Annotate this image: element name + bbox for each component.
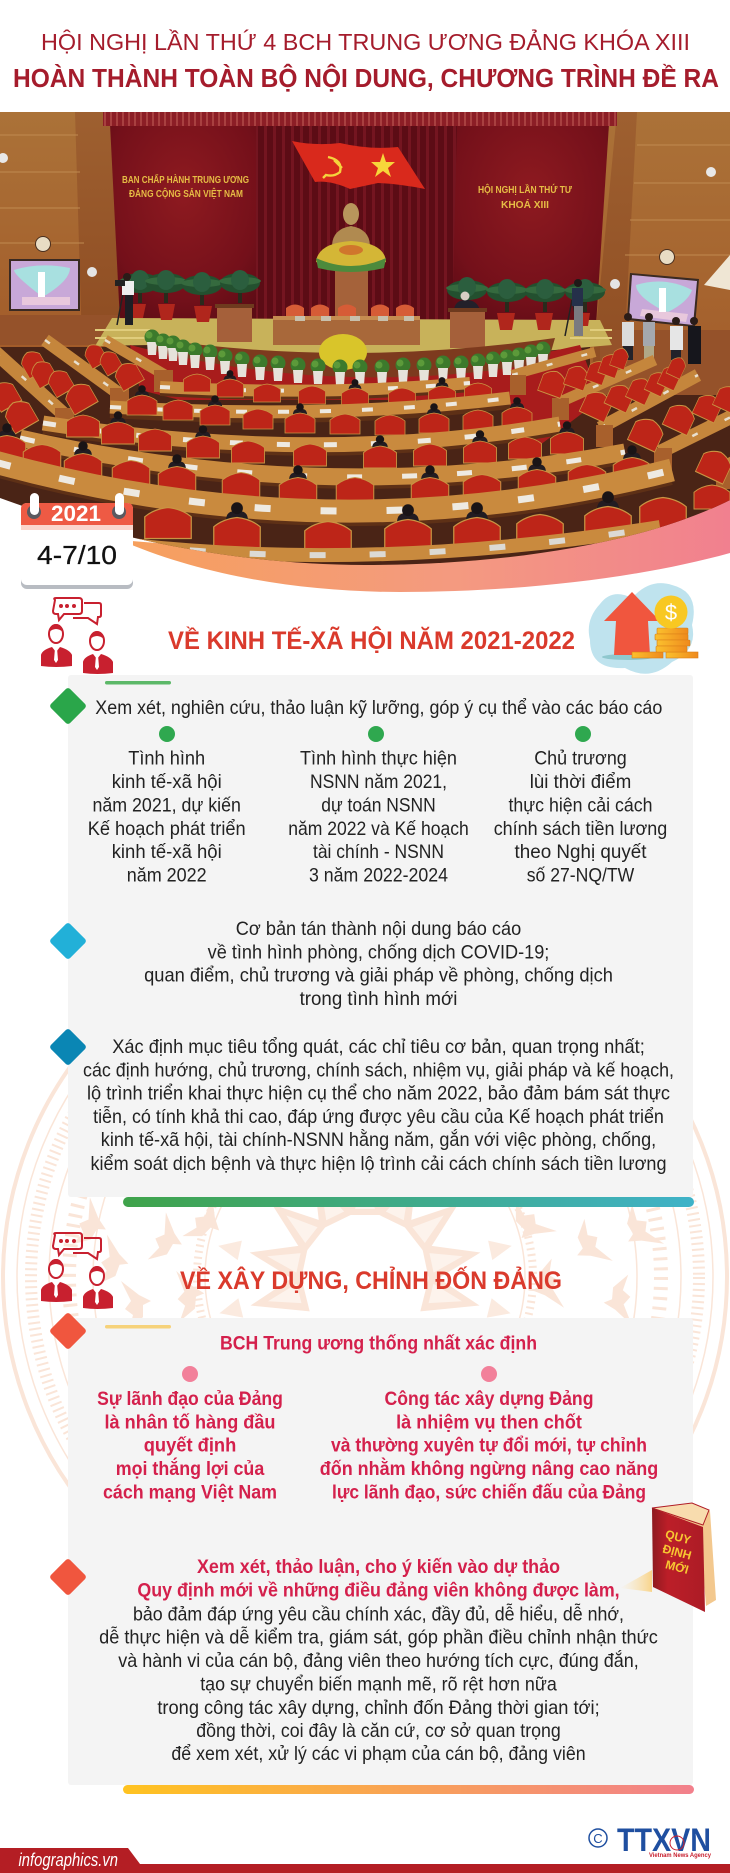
left column text [97,1388,283,1503]
icon: blue diamond [49,922,87,960]
footer red band [0,1848,730,1873]
seating row C [43,411,584,468]
left column text: là nhân tố hàng đầu [104,1412,276,1434]
objectives text: kinh tế-xã hội, tài chính-NSNN hằng năm, gắn với việc phòng, chống, [101,1128,656,1151]
right column text: Công tác xây dựng Đảng [384,1388,594,1410]
red curtains [103,112,617,325]
covid text: về tình hình phòng, chống dịch COVID-19; [208,942,549,964]
icon: rule book [620,1503,716,1612]
left column text: cách mạng Việt Nam [103,1481,277,1503]
wall lettering: KHOÁ XIII [501,198,549,211]
column 1 text [88,748,246,886]
icon: red diamond 2 [49,1558,87,1596]
objectives text: tiễn, có tính khả thi cao, đáp ứng được yêu cầu của Kế hoạch phát triển [93,1105,664,1128]
calendar date: 4-7/10 [37,540,117,570]
regulation text [99,1556,658,1765]
green bottom bar [123,1197,694,1207]
column 1 text: kinh tế-xã hội [112,771,222,793]
title [13,27,719,93]
right column text: là nhiệm vụ then chốt [396,1412,582,1434]
column 2 text [288,748,469,886]
screens and clocks [0,153,730,327]
wood base of plant row [150,338,555,377]
wall lettering: ĐẢNG CỘNG SẢN VIỆT NAM [129,187,243,200]
right column text: đốn nhằm không ngừng nâng cao năng [320,1456,658,1480]
cameramen and press [115,273,701,364]
column 1 text: Tình hình [128,748,205,770]
side wing desks [0,340,730,489]
icon: people discussing (section 1) [41,598,113,674]
objectives text: các định hướng, chủ trương, chính sách, nhiệm vụ, giải pháp và kế hoạch, [83,1059,674,1081]
panel: party building [49,1312,694,1794]
column 1 text: Kế hoạch phát triển [88,818,246,840]
wall lettering: BAN CHẤP HÀNH TRUNG ƯƠNG [122,173,249,186]
icon: people discussing (section 2) [41,1233,113,1309]
orange pink curved band [120,495,730,592]
yellow flower mound [319,334,367,370]
seating row A [160,370,492,406]
icon: rule book: QUY [664,1527,692,1547]
website label: infographics.vn [18,1850,118,1870]
heading: socio-economic: VỀ KINH TẾ-XÃ HỘI NĂM 2021-2022 [168,625,575,655]
bullet dots [159,726,591,742]
right column text: lực lãnh đạo, sức chiến đấu của Đảng [332,1481,646,1503]
wall lettering [122,174,572,208]
left column text: mọi thắng lợi của [116,1456,264,1480]
icon: rule book: MỚI [664,1556,690,1577]
left column text: Sự lãnh đạo của Đảng [97,1388,283,1410]
seating row F [130,527,660,555]
bust and flowers [316,203,386,322]
left column text: quyết định [144,1435,236,1457]
covid text: trong tình hình mới [300,988,457,1010]
icon: dark blue diamond [49,1028,87,1066]
seating row B [110,385,532,435]
cycad plants [119,270,606,330]
icon: rising arrow and coins [589,583,698,674]
TTXVN logo: Vietnam News Agency [649,1853,712,1859]
regulation text: và hành vi của cán bộ, đảng viên theo hướng tích cực, đúng đắn, [118,1649,639,1672]
objectives text: Xác định mục tiêu tổng quát, các chỉ tiêu cơ bản, quan trọng nhất; [112,1036,645,1058]
objectives text: kiểm soát dịch bệnh và thực hiện lộ trình cải cách chính sách tiền lương [90,1153,666,1175]
date calendar [21,493,133,589]
regulation text: dễ thực hiện và dễ kiểm tra, giám sát, góp phần điều chỉnh nhận thức [99,1626,658,1648]
title line 1: HỘI NGHỊ LẦN THỨ 4 BCH TRUNG ƯƠNG ĐẢNG KHÓA XIII [41,27,690,55]
panel: socio-economic [49,675,694,1207]
chairs and table on stage [215,292,487,348]
regulation text: đồng thời, coi đây là căn cứ, cơ sở quan trọng [196,1720,561,1742]
objectives text: lộ trình triển khai thực hiện cụ thể cho năm 2022, bảo đảm bám sát thực [87,1083,670,1105]
objectives text [83,1036,674,1175]
regulation text: để xem xét, xử lý các vi phạm của cán bộ, đảng viên [171,1743,586,1765]
column 1 text: năm 2021, dự kiến [92,794,241,816]
side wing chairs [0,341,730,484]
regulation text: bảo đảm đáp ứng yêu cầu chính xác, đầy đủ, dễ hiểu, dễ nhớ, [133,1602,624,1625]
column 2 text: dự toán NSNN [321,794,436,816]
seating row D [0,423,651,502]
covid text: Cơ bản tán thành nội dung báo cáo [236,918,521,940]
column 1 text: năm 2022 [127,864,207,886]
regulation text: tạo sự chuyển biến mạnh mẽ, rõ rệt hơn nữa [200,1673,557,1695]
potted plants row [144,330,550,385]
yellow accent bar [105,1325,171,1328]
icon: green diamond [49,687,87,725]
title line 2: HOÀN THÀNH TOÀN BỘ NỘI DUNG, CHƯƠNG TRÌNH ĐỀ RA [13,63,719,93]
seating row E [0,462,730,552]
pink bullets [182,1366,497,1382]
right column text [320,1388,658,1503]
column 2 text: tài chính - NSNN [313,841,444,863]
column 3 text: số 27-NQ/TW [527,864,635,886]
covid text: quan điểm, chủ trương và giải pháp về phòng, chống dịch [144,964,613,986]
heading: party building: VỀ XÂY DỰNG, CHỈNH ĐỐN ĐẢNG [180,1265,562,1295]
TTXVN logo: C [593,1831,603,1846]
column 2 text: NSNN năm 2021, [310,771,447,793]
regulation text: trong công tác xây dựng, chỉnh đốn Đảng thời gian tới; [157,1697,600,1719]
regulation text: Quy định mới về những điều đảng viên không được làm, [137,1580,620,1602]
party flag and national flag [292,141,425,189]
icon: rising arrow and coins: $ [665,600,677,625]
column 3 text: chính sách tiền lương [494,818,667,840]
icon: red diamond [49,1312,87,1350]
conference hall photo [0,112,730,572]
column 3 text: Chủ trương [534,748,627,770]
TTXVN logo: TTXVN [617,1822,711,1858]
green accent bar [105,681,171,684]
covid text [144,918,613,1010]
wood walls [0,112,730,395]
carpet [130,345,600,445]
column 2 text: năm 2022 và Kế hoạch [288,818,469,840]
icon: rule book: ĐỊNH [661,1542,693,1563]
yellow pink bottom bar [123,1785,694,1794]
column 1 text: kinh tế-xã hội [112,841,222,863]
column 2 text: 3 năm 2022-2024 [309,864,448,886]
TTXVN logo [589,1822,712,1859]
stage floor [96,318,612,353]
review intro text: Xem xét, nghiên cứu, thảo luận kỹ lưỡng, góp ý cụ thể vào các báo cáo [95,697,662,719]
regulation text: Xem xét, thảo luận, cho ý kiến vào dự thảo [197,1556,560,1578]
wall lettering: HỘI NGHỊ LẦN THỨ TƯ [478,183,573,196]
right column text: và thường xuyên tự đổi mới, tự chỉnh [331,1435,647,1457]
column 3 text: theo Nghị quyết [514,841,647,863]
subheading: BCH Trung ương thống nhất xác định [220,1332,537,1354]
column 2 text: Tình hình thực hiện [300,748,457,770]
column 3 text: thực hiện cải cách [508,794,652,816]
background drum pattern [3,915,727,1639]
calendar year: 2021 [51,501,101,526]
column 3 text [494,748,667,886]
column 3 text: lùi thời điểm [530,771,631,793]
